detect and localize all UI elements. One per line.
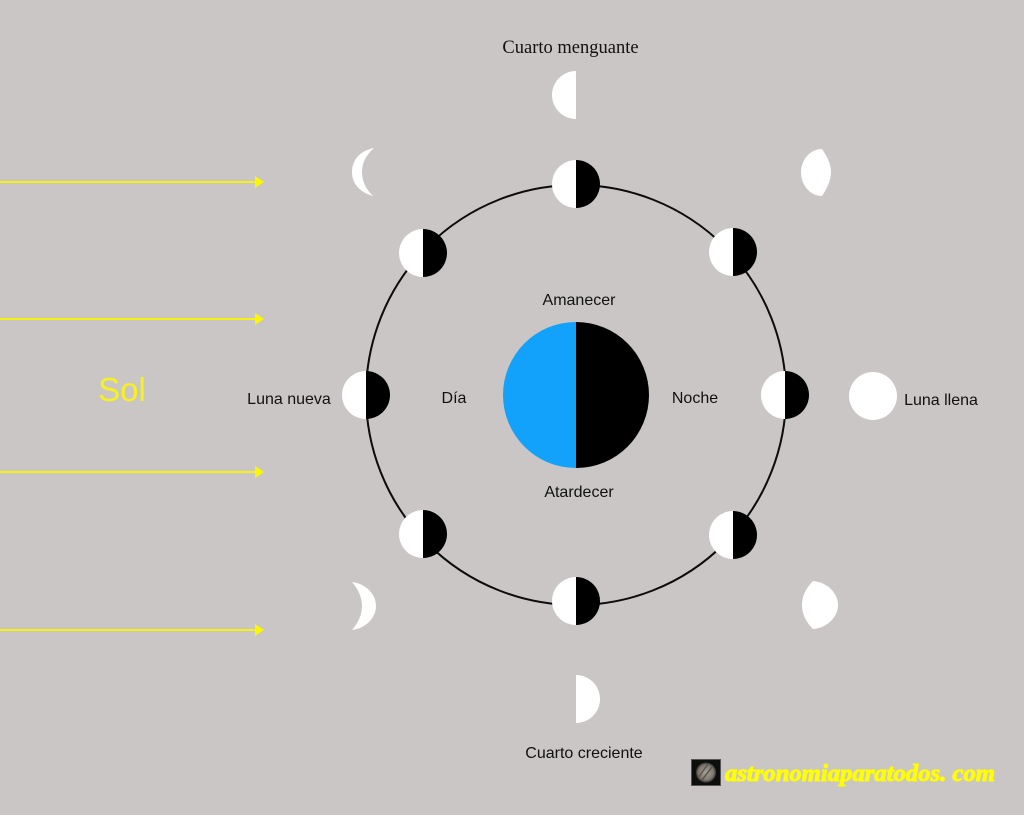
earth — [503, 322, 649, 468]
arrow 2 — [0, 313, 264, 325]
orbit moon: upper left — [399, 229, 447, 277]
orbit moon: left — [342, 371, 390, 419]
orbit moon: right — [761, 371, 809, 419]
label: Amanecer: Amanecer — [543, 292, 616, 309]
phase: waxing crescent — [352, 582, 376, 630]
orbit moon: lower right — [709, 511, 757, 559]
label: Noche: Noche — [672, 390, 718, 407]
phase: waning gibbous — [801, 149, 831, 196]
orbit moon: bottom — [552, 577, 600, 625]
sunlight arrows — [0, 176, 264, 636]
arrow 1 — [0, 176, 264, 188]
logo: website text: astronomiaparatodos. com — [725, 761, 995, 787]
orbit moon: lower left — [399, 510, 447, 558]
arrow 3 — [0, 466, 264, 478]
label: Cuarto menguante: Cuarto menguante — [502, 38, 639, 58]
label: Sol: Sol — [98, 371, 146, 408]
label: Día: Día — [442, 390, 467, 407]
label: Cuarto creciente: Cuarto creciente — [525, 745, 643, 762]
phase: waxing gibbous — [802, 581, 838, 629]
phase: first quarter — [576, 675, 600, 723]
orbit moon: upper right — [709, 228, 757, 276]
logo: Jupiter icon — [692, 760, 720, 786]
phase: last quarter — [552, 71, 576, 119]
orbit circle — [366, 185, 786, 605]
arrow 4 — [0, 624, 264, 636]
label: Luna llena: Luna llena — [904, 392, 978, 409]
label: Atardecer: Atardecer — [544, 484, 614, 501]
phase: waning crescent — [352, 148, 374, 196]
orbit moon: top — [552, 160, 600, 208]
phase: full moon — [849, 372, 897, 420]
label: Luna nueva: Luna nueva — [247, 391, 331, 408]
